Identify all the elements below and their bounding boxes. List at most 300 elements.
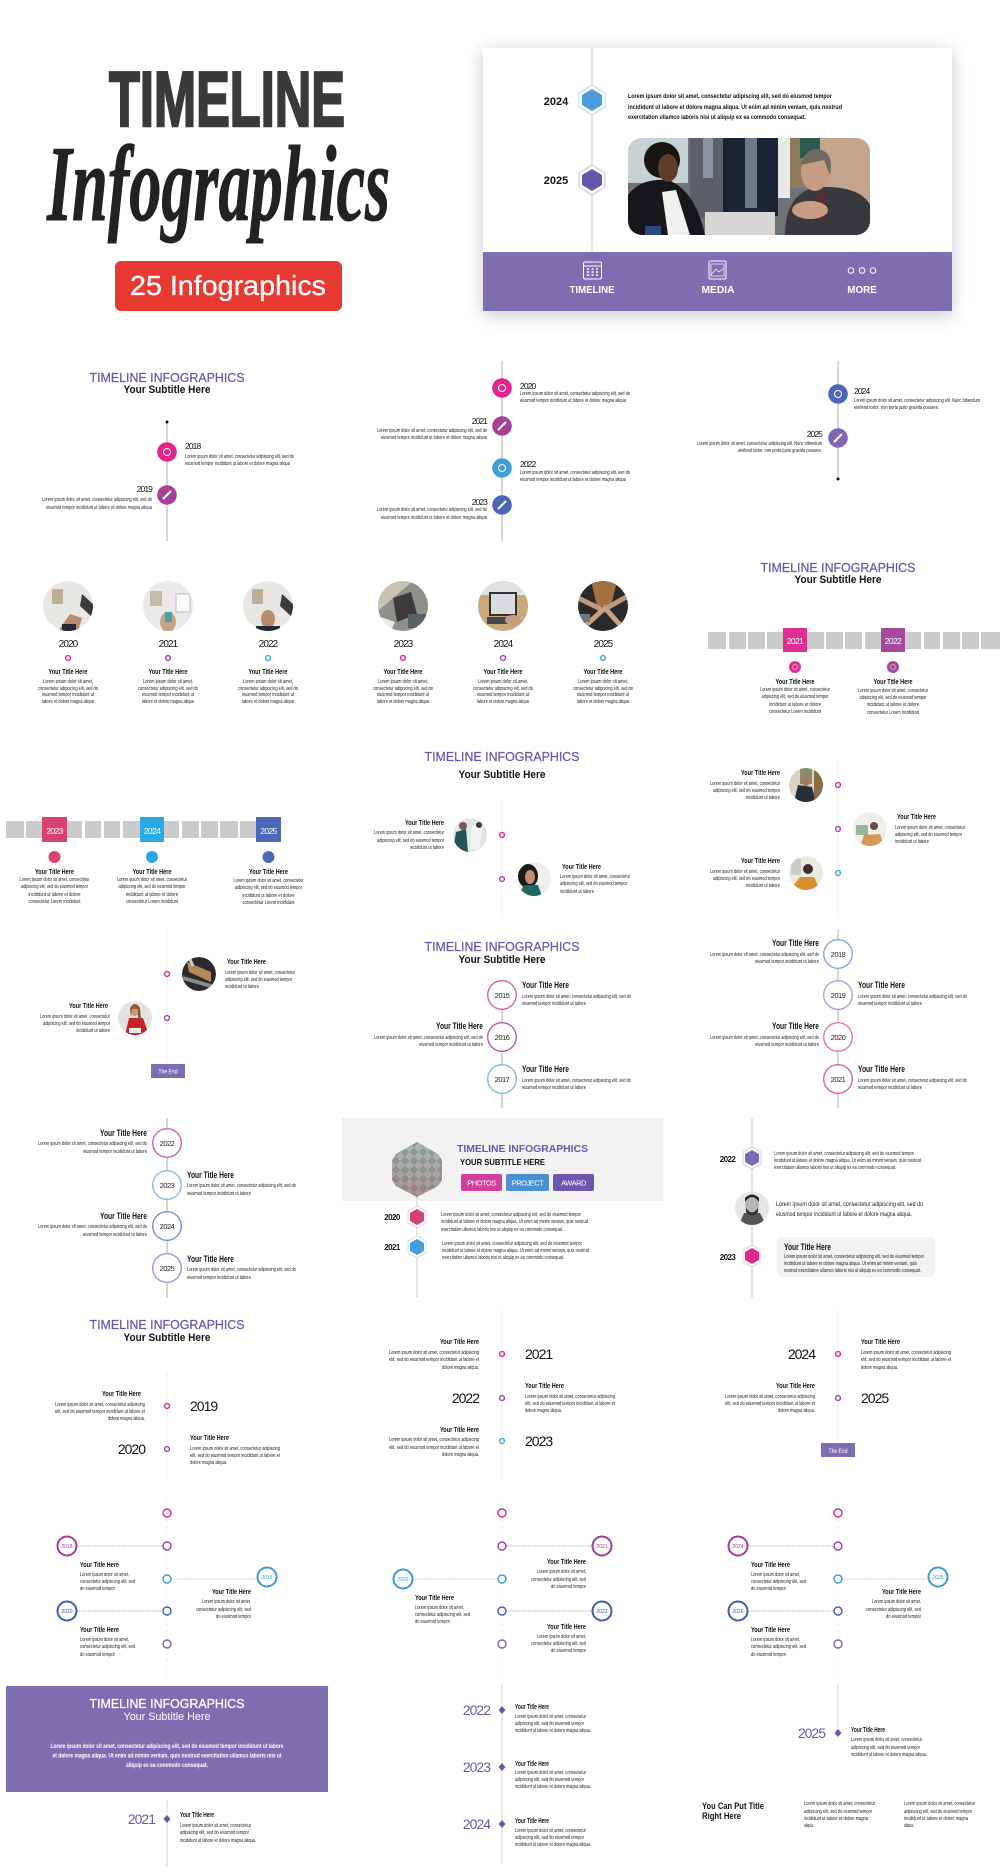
panel: big year timeline 2024-2025: dolore magna aliqua. (778, 1408, 815, 1414)
panel: big year timeline 2019-2020: dolore magna aliqua. (190, 1460, 227, 1466)
panel: hex timeline with portrait: 2022 (720, 1155, 736, 1164)
panel: photo columns 2020-2022: consectetur adipiscing elit, sed do (238, 686, 298, 692)
hexagon 2024: 2024 (544, 96, 569, 108)
panel: block timeline 2021-2022: 2021 (787, 636, 804, 646)
panel: diamond timeline 2025 with closing text (702, 1684, 975, 1829)
panel: timeline 2020-2023: 2021 (472, 416, 488, 426)
hexagon 2025 (544, 165, 605, 195)
panel: photo columns 2020-2022: Your Title Here (248, 669, 288, 676)
panel: big year timeline 2021-2023: dolore magna aliqua. (442, 1365, 479, 1371)
panel: ring timeline 2022-2025: 2022 (160, 1139, 175, 1148)
panel: ring timeline 2015-2017: Your Title Here (436, 1021, 483, 1031)
panel: dotted timeline left: consectetur adipiscing elit, sed (196, 1607, 251, 1613)
panel: timeline 2018-2019: Lorem ipsum dolor sit amet, consectetur adipiscing elit, sed do (42, 497, 152, 503)
photo 2020 (43, 581, 93, 632)
panel: purple header with 2021 (6, 1686, 328, 1867)
panel: photo columns 2020-2022: eiusmod tempor incididunt ut (42, 692, 94, 698)
panel: dotted timeline left: Lorem ipsum dolor sit amet, (80, 1637, 129, 1643)
panel: photo columns 2020-2022: labore et dolore magna aliqua (242, 699, 294, 705)
panel: hex timeline with portrait: Lorem ipsum dolor sit amet, consectetur adipiscing elit, sed do eiusmod tempor (774, 1151, 914, 1157)
panel: dotted timeline center: Your Title Here (547, 1559, 586, 1566)
panel: dotted timeline right: consectetur adipiscing elit, sed (751, 1579, 806, 1585)
nav: timeline (570, 262, 614, 296)
panel: photo timeline two items: Your Title Here (405, 820, 444, 827)
panel: timeline 2020-2023 (377, 361, 630, 541)
panel: diamond timeline 2025 with closing text: Lorem ipsum dolor sit amet, consectetur (904, 1801, 975, 1807)
panel: big year timeline 2024-2025: Lorem ipsum dolor sit amet, consectetur adipiscing (725, 1394, 815, 1400)
panel: dotted timeline left: do eiusmod tempor (80, 1586, 115, 1592)
panel: photo columns 2023-2025: 2025 (594, 639, 614, 650)
panel: photo columns 2023-2025 (373, 581, 633, 705)
panel: photo timeline three items: Your Title Here (741, 770, 780, 777)
panel: big year timeline 2021-2023: elit, sed do eiusmod tempor incididunt ut labore et (525, 1401, 615, 1407)
panel: photo timeline with The End: incididunt ut labore (76, 1028, 110, 1034)
panel: photo columns 2023-2025: labore et dolore magna aliqua (577, 699, 629, 705)
title: Infographics script: Infographics (46, 125, 390, 244)
panel: big year timeline 2024-2025: 2025 (861, 1390, 889, 1406)
panel: timeline 2020-2023: Lorem ipsum dolor sit amet, consectetur adipiscing elit, sed do (520, 470, 630, 476)
panel: photo timeline two items: Your Title Here (562, 864, 601, 871)
panel: ring timeline 2018-2021: Lorem ipsum dolor sit amet, consectetur adipiscing elit, sed do (858, 1078, 967, 1084)
panel: photo timeline with The End (40, 928, 295, 1078)
panel: block timeline 2023-2025: adipiscing elit, sed do eiusmod tempor (21, 884, 88, 890)
photo 2021 (143, 581, 193, 632)
panel: photo timeline three items: Lorem ipsum dolor sit amet, consectetur (710, 869, 780, 875)
title: TIMELINE: TIMELINE (109, 55, 345, 143)
panel: grey header with buttons and hex timeline: exercitation ullamco laboris nisi ut aliquip ex ea commodo consequat. (441, 1227, 563, 1233)
panel: ring timeline 2018-2021: Your Title Here (858, 980, 905, 990)
panel: ring timeline 2018-2021: eiusmod tempor incididunt ut labore (755, 959, 819, 965)
panel: block timeline 2021-2022: Lorem ipsum dolor sit amet, consectetur (858, 688, 928, 694)
panel: photo columns 2020-2022: 2021 (159, 639, 179, 650)
panel: dotted timeline left: do eiusmod tempor (216, 1614, 251, 1620)
panel: photo timeline three items: Your Title Here (897, 814, 936, 821)
panel: ring timeline 2018-2021: Your Title Here (772, 1021, 819, 1031)
panel: timeline 2018-2019: eiusmod tempor incididunt ut labore et dolore magna aliqua (46, 505, 152, 511)
panel: big year timeline 2024-2025: 2024 (788, 1346, 816, 1362)
panel: ring timeline 2022-2025 (38, 1118, 296, 1298)
panel: block timeline 2023-2025 (6, 817, 304, 906)
nav: media (702, 261, 735, 296)
panel: dotted timeline right: consectetur adipiscing elit, sed (866, 1607, 921, 1613)
panel: diamond timeline 2022-2024 (463, 1684, 591, 1864)
panel: ring timeline 2022-2025: Lorem ipsum dolor sit amet, consectetur adipiscing elit, sed do (38, 1224, 147, 1230)
panel: big year timeline 2019-2020: 2019 (190, 1398, 218, 1414)
panel: block timeline 2023-2025: 2025 (260, 826, 278, 836)
panel: diamond timeline 2022-2024: Your Title Here (515, 1818, 549, 1825)
photo: portrait (735, 1191, 769, 1225)
panel: block timeline 2021-2022: Your Subtitle Here (794, 574, 882, 586)
panel: block timeline 2023-2025: incididunt ut labore et dolore (126, 892, 178, 898)
panel: photo timeline with The End: adipiscing elit, sed do eiusmod tempor (225, 977, 292, 983)
panel: ring timeline 2018-2021: Your Title Here (772, 938, 819, 948)
panel: big year timeline 2021-2023: 2021 (525, 1346, 553, 1362)
panel: big year timeline 2021-2023: Your Title Here (525, 1383, 564, 1390)
text block: Lorem ipsum dolor sit amet, consectetur adipiscing elit, sed do eiusmod tempor (628, 93, 832, 100)
panel: big year timeline 2021-2023: dolore magna aliqua. (525, 1408, 562, 1414)
panel: ring timeline 2015-2017: Lorem ipsum dolor sit amet, consectetur adipiscing elit, sed do (522, 1078, 631, 1084)
panel: ring timeline 2015-2017: eiusmod tempor incididunt ut labore (522, 1085, 586, 1091)
badge: 25 Infographics: 25 Infographics (130, 270, 326, 301)
panel: timeline 2018-2019 (42, 371, 294, 541)
button: project (506, 1174, 549, 1191)
panel: diamond timeline 2025 with closing text: adipiscing elit, sed do eiusmod tempor (804, 1809, 872, 1815)
panel: big year timeline 2019-2020: Your Title Here (190, 1435, 229, 1442)
panel: dotted timeline left: Your Title Here (212, 1589, 251, 1596)
button: award (553, 1174, 594, 1191)
panel: timeline 2020-2023: eiusmod tempor incididunt ut labore et dolore magna aliqua (381, 515, 487, 521)
panel: ring timeline 2022-2025: eiusmod tempor incididunt ut labore (187, 1275, 251, 1281)
panel: big year timeline 2019-2020: Lorem ipsum dolor sit amet, consectetur adipiscing (55, 1402, 145, 1408)
panel: big year timeline 2021-2023: Lorem ipsum dolor sit amet, consectetur adipiscing (389, 1437, 479, 1443)
panel: ring timeline 2022-2025: eiusmod tempor incididunt ut labore (83, 1232, 147, 1238)
panel: dotted timeline left: Lorem ipsum dolor sit amet, (80, 1572, 129, 1578)
panel: ring timeline 2015-2017 (374, 940, 631, 1108)
panel: diamond timeline 2022-2024: adipiscing elit, sed do eiusmod tempor (515, 1721, 584, 1727)
panel: timeline 2018-2019: Lorem ipsum dolor sit amet, consectetur adipiscing elit, sed do (185, 454, 294, 460)
panel: block timeline 2023-2025: Lorem ipsum dolor sit amet, consectetur (117, 877, 187, 883)
panel: grey header with buttons and hex timeline: 2020 (384, 1213, 401, 1222)
panel: photo columns 2023-2025: 2023 (394, 639, 414, 650)
panel: hex timeline with portrait: Lorem ipsum dolor sit amet, consectetur adipiscing elit, sed do (776, 1201, 923, 1208)
panel: big year timeline 2021-2023 (389, 1310, 615, 1480)
panel: photo columns 2023-2025: labore et dolore magna aliqua (377, 699, 429, 705)
panel: ring timeline 2018-2021: Your Title Here (858, 1064, 905, 1074)
panel: photo columns 2020-2022 (38, 581, 298, 705)
panel: ring timeline 2022-2025: Your Title Here (100, 1128, 147, 1138)
panel: block timeline 2023-2025: Lorem ipsum dolor sit amet, consectetur (20, 877, 90, 883)
panel: block timeline 2021-2022: consectetur Lorem incididunt (769, 709, 821, 715)
panel: dotted timeline center: Your Title Here (547, 1624, 586, 1631)
panel: purple header with 2021: incididunt ut labore et dolore magna aliqua. (180, 1838, 256, 1844)
panel: dotted timeline center: Lorem ipsum dolor sit amet, (537, 1569, 586, 1575)
panel: photo columns 2023-2025: consectetur adipiscing elit, sed do (373, 686, 433, 692)
panel: dotted timeline center: Your Title Here (415, 1595, 454, 1602)
panel: diamond timeline 2025 with closing text: Lorem ipsum dolor sit amet, consectetur (804, 1801, 875, 1807)
panel: photo columns 2023-2025: eiusmod tempor incididunt ut (477, 692, 529, 698)
nav: more: MORE (847, 284, 877, 296)
panel: dotted timeline right: 2026 (732, 1609, 744, 1615)
panel: timeline 2024-2025: eleifend tortor, non porta justo gravida posuere. (854, 405, 939, 411)
panel: purple header with 2021: aliquip ex ea commodo consequat. (126, 1762, 208, 1769)
panel: purple header with 2021: Lorem ipsum dolor sit amet, consectetur adipiscing elit, sed do eiusmod tempor incididunt ut labore (50, 1743, 284, 1750)
panel: block timeline 2023-2025: adipiscing elit, sed do eiusmod tempor (118, 884, 186, 890)
photo 2024 (478, 581, 528, 631)
panel: timeline 2018-2019: TIMELINE INFOGRAPHICS (90, 371, 244, 385)
panel: purple header with 2021: adipiscing elit, sed do eiusmod tempor (180, 1830, 249, 1836)
panel: grey header with buttons and hex timeline: incididunt ut labore et dolore magna aliqua. Ut enim ad minim veniam, quis nostrud (442, 1248, 589, 1254)
panel: photo columns 2023-2025: consectetur adipiscing elit, sed do (573, 686, 633, 692)
panel: ring timeline 2018-2021: eiusmod tempor incididunt ut labore (858, 1085, 922, 1091)
panel: dotted timeline center: 2022 (397, 1577, 409, 1583)
panel: block timeline 2023-2025: Your Title Here (249, 869, 288, 876)
panel: dotted timeline right: Lorem ipsum dolor sit amet, (751, 1637, 800, 1643)
panel: diamond timeline 2025 with closing text: incididunt ut labore et dolore magna (904, 1816, 968, 1822)
photo 2023 (378, 581, 428, 631)
panel: big year timeline 2024-2025: The End (828, 1448, 848, 1455)
panel: dotted timeline right: Your Title Here (751, 1562, 790, 1569)
panel: grey header with buttons and hex timeline: 2021 (384, 1243, 401, 1252)
panel: timeline 2024-2025: eleifend tortor, non porta justo gravida posuere. (738, 448, 822, 454)
panel: timeline 2020-2023: Lorem ipsum dolor sit amet, consectetur adipiscing elit, sed do (377, 428, 487, 434)
panel: dotted timeline center: do eiusmod tempor (551, 1648, 586, 1654)
panel: block timeline 2023-2025: incididunt ut labore et dolore (242, 893, 295, 899)
panel: block timeline 2023-2025: Lorem ipsum dolor sit amet, consectetur (234, 878, 304, 884)
photo 2025 (578, 581, 628, 631)
panel: dotted timeline right: consectetur adipiscing elit, sed (751, 1644, 806, 1650)
panel: big year timeline 2019-2020: Lorem ipsum dolor sit amet, consectetur adipiscing (190, 1446, 280, 1452)
panel: big year timeline 2019-2020: elit, sed do eiusmod tempor incididunt ut labore et (55, 1409, 145, 1415)
panel: dotted timeline right: Your Title Here (751, 1627, 790, 1634)
panel: timeline 2020-2023: 2022 (520, 459, 536, 469)
panel: hero slide preview (483, 48, 952, 315)
panel: diamond timeline 2022-2024: incididunt ut labore et dolore magna aliqua. (515, 1842, 591, 1848)
panel: timeline 2020-2023: eiusmod tempor incididunt ut labore et dolore magna aliqua (381, 435, 487, 441)
panel: photo columns 2020-2022: eiusmod tempor incididunt ut (242, 692, 294, 698)
panel: photo timeline two items (374, 750, 630, 917)
panel: photo timeline three items: Lorem ipsum dolor sit amet, consectetur (895, 825, 965, 831)
panel: timeline 2020-2023: 2020 (520, 381, 536, 391)
panel: big year timeline 2021-2023: Lorem ipsum dolor sit amet, consectetur adipiscing (525, 1394, 615, 1400)
panel: grey header with buttons and hex timeline: Lorem ipsum dolor sit amet, consectetur adipiscing elit, sed do eiusmod tempor (442, 1241, 582, 1247)
panel: photo columns 2023-2025: 2024 (494, 639, 514, 650)
hexagon 2024 (544, 85, 605, 115)
panel: ring timeline 2022-2025: eiusmod tempor incididunt ut labore (187, 1191, 251, 1197)
button: photos: PHOTOS (467, 1178, 496, 1188)
panel: ring timeline 2022-2025: 2023 (160, 1181, 175, 1190)
panel: block timeline 2021-2022: consectetur Lorem incididunt (867, 710, 919, 716)
panel: purple header with 2021: et dolore magna aliqua. Ut enim ad minim veniam, quis nostrud exercitation ullamco laboris nisi ut (52, 1752, 282, 1760)
panel: big year timeline 2019-2020: elit, sed do eiusmod tempor incididunt ut labore et (190, 1453, 280, 1459)
panel: timeline 2018-2019: 2019 (137, 484, 153, 494)
panel: purple header with 2021: Lorem ipsum dolor sit amet, consectetur (180, 1823, 251, 1829)
panel: grey header with buttons and hex timeline: YOUR SUBTITLE HERE (460, 1157, 545, 1167)
button: award: AWARD (561, 1178, 587, 1188)
panel: diamond timeline 2022-2024: Your Title Here (515, 1761, 549, 1768)
panel: photo timeline two items: incididunt ut labore (560, 889, 594, 895)
panel: photo timeline three items: incididunt ut labore (746, 795, 780, 801)
panel: dotted timeline left: Your Title Here (80, 1562, 119, 1569)
panel: purple header with 2021: 2021 (128, 1811, 156, 1827)
panel: diamond timeline 2022-2024: Lorem ipsum dolor sit amet, consectetur (515, 1770, 586, 1776)
panel: photo timeline three items: adipiscing elit, sed do eiusmod tempor (895, 832, 962, 838)
panel: ring timeline 2015-2017: TIMELINE INFOGRAPHICS (424, 940, 580, 954)
panel: ring timeline 2018-2021: eiusmod tempor incididunt ut labore (755, 1042, 819, 1048)
panel: block timeline 2021-2022: incididunt ut labore et dolore (867, 702, 919, 708)
panel: photo columns 2023-2025: Lorem ipsum dolor sit amet, (478, 679, 528, 685)
panel: hex timeline with portrait (720, 1118, 935, 1298)
panel: block timeline 2023-2025: consectetur Lorem incididunt (242, 900, 295, 906)
panel: diamond timeline 2025 with closing text: aliqua. (904, 1823, 914, 1829)
panel: photo columns 2020-2022: Your Title Here (48, 669, 88, 676)
panel: ring timeline 2015-2017: Lorem ipsum dolor sit amet, consectetur adipiscing elit, sed do (374, 1035, 483, 1041)
panel: hex timeline with portrait: incididunt ut labore et dolore magna aliqua. Ut enim ad minim veniam, quis nostrud (774, 1158, 921, 1164)
panel: dotted timeline left: 2020 (61, 1609, 73, 1615)
panel: big year timeline 2024-2025: Lorem ipsum dolor sit amet, consectetur adipiscing (861, 1350, 951, 1356)
panel: photo columns 2023-2025: labore et dolore magna aliqua (477, 699, 529, 705)
text block (628, 93, 842, 121)
panel: ring timeline 2018-2021: 2018 (831, 950, 846, 959)
panel: hex timeline with portrait: nostrud exercitation ullamco laboris nisi ut aliquip ex ea commodo consequat. (784, 1268, 921, 1274)
panel: diamond timeline 2025 with closing text: Your Title Here (851, 1727, 885, 1734)
panel: dotted timeline center: 2021 (596, 1544, 608, 1550)
panel: dotted timeline left: consectetur adipiscing elit, sed (80, 1579, 135, 1585)
panel: big year timeline 2021-2023: Your Title Here (440, 1339, 479, 1346)
panel: photo timeline two items: adipiscing elit, sed do eiusmod tempor (377, 838, 444, 844)
panel: dotted timeline left: do eiusmod tempor (80, 1652, 115, 1658)
panel: diamond timeline 2025 with closing text: aliqua. (804, 1823, 814, 1829)
panel: diamond timeline 2025 with closing text: incididunt ut labore et dolore magna (804, 1816, 868, 1822)
panel: block timeline 2023-2025: 2024 (144, 826, 161, 836)
panel: ring timeline 2022-2025: Your Title Here (100, 1211, 147, 1221)
panel: big year timeline 2021-2023: Lorem ipsum dolor sit amet, consectetur adipiscing (389, 1350, 479, 1356)
panel: dotted timeline center: consectetur adipiscing elit, sed (415, 1612, 470, 1618)
panel: photo timeline three items: Your Title Here (741, 858, 780, 865)
panel: purple header with 2021: Your Subtitle Here (124, 1711, 210, 1723)
panel: ring timeline 2015-2017: 2015 (495, 991, 510, 1000)
panel: big year timeline 2021-2023: Your Title Here (440, 1427, 479, 1434)
panel: big year timeline 2021-2023: dolore magna aliqua. (442, 1452, 479, 1458)
panel: big year timeline 2024-2025: Your Title Here (861, 1339, 900, 1346)
panel: big year timeline 2024-2025: elit, sed do eiusmod tempor incididunt ut labore et (861, 1357, 951, 1363)
panel: block timeline 2023-2025: adipiscing elit, sed do eiusmod tempor (235, 885, 302, 891)
panel: dotted timeline center: 2023 (596, 1609, 608, 1615)
panel: diamond timeline 2025 with closing text: You Can Put Title (702, 1801, 764, 1812)
panel: dotted timeline center: Lorem ipsum dolor sit amet, (415, 1605, 464, 1611)
panel: dotted timeline right: 2024 (732, 1544, 744, 1550)
panel: big year timeline 2024-2025: Your Title Here (776, 1383, 815, 1390)
panel: timeline 2020-2023: eiusmod tempor incididunt ut labore et dolore magna aliqua (520, 398, 626, 404)
text block: exercitation ullamco laboris nisi ut aliquip ex ea commodo consequat. (628, 114, 806, 121)
panel: dotted timeline center: consectetur adipiscing elit, sed (531, 1577, 586, 1583)
panel: photo timeline two items: adipiscing elit, sed do eiusmod tempor (560, 881, 627, 887)
panel: photo columns 2020-2022: Lorem ipsum dolor sit amet, (143, 679, 193, 685)
panel: dotted timeline left: Lorem ipsum dolor sit amet, (202, 1599, 251, 1605)
panel: big year timeline 2021-2023: elit, sed do eiusmod tempor incididunt ut labore et (389, 1357, 479, 1363)
panel: big year timeline 2021-2023: 2022 (452, 1390, 480, 1406)
panel: diamond timeline 2022-2024: adipiscing elit, sed do eiusmod tempor (515, 1777, 584, 1783)
panel: block timeline 2021-2022: adipiscing elit, sed do eiusmod tempor (762, 694, 829, 700)
panel: diamond timeline 2025 with closing text: adipiscing elit, sed do eiusmod tempor (904, 1809, 972, 1815)
panel: ring timeline 2015-2017: Lorem ipsum dolor sit amet, consectetur adipiscing elit, sed do (522, 994, 631, 1000)
panel: photo columns 2020-2022: labore et dolore magna aliqua (42, 699, 94, 705)
panel: ring timeline 2018-2021: eiusmod tempor incididunt ut labore (858, 1001, 922, 1007)
panel: block timeline 2021-2022: TIMELINE INFOGRAPHICS (760, 561, 916, 575)
panel: block timeline 2023-2025: Your Title Here (35, 869, 74, 876)
panel: grey header with buttons and hex timeline: TIMELINE INFOGRAPHICS (457, 1143, 588, 1155)
panel: big year timeline 2024-2025: elit, sed do eiusmod tempor incididunt ut labore et (725, 1401, 815, 1407)
panel: dotted timeline center: do eiusmod tempor (551, 1584, 586, 1590)
panel: ring timeline 2018-2021: Lorem ipsum dolor sit amet, consectetur adipiscing elit, sed do (858, 994, 967, 1000)
nav: more (847, 268, 877, 296)
panel: photo columns 2020-2022: Lorem ipsum dolor sit amet, (43, 679, 93, 685)
panel: ring timeline 2018-2021: 2020 (831, 1033, 846, 1042)
panel: hex timeline with portrait: exercitation ullamco laboris nisi ut aliquip ex ea commodo consequat. (774, 1165, 896, 1171)
panel: block timeline 2021-2022: Lorem ipsum dolor sit amet, consectetur (760, 687, 830, 693)
text block: incididunt ut labore et dolore magna aliqua. Ut enim ad minim veniam, quis nostrud (628, 104, 842, 111)
panel: block timeline 2023-2025: consectetur Lorem incididunt (28, 899, 81, 905)
panel: diamond timeline 2022-2024: Lorem ipsum dolor sit amet, consectetur (515, 1828, 586, 1834)
panel: ring timeline 2022-2025: 2025 (160, 1264, 175, 1273)
panel: ring timeline 2015-2017: 2017 (495, 1075, 510, 1084)
panel: photo timeline three items: Lorem ipsum dolor sit amet, consectetur (710, 781, 780, 787)
panel: ring timeline 2018-2021: Lorem ipsum dolor sit amet, consectetur adipiscing elit, sed do (710, 952, 819, 958)
panel: dotted timeline right: 2025 (932, 1575, 944, 1581)
panel: ring timeline 2018-2021 (710, 929, 967, 1108)
panel: timeline 2024-2025: 2025 (807, 429, 823, 439)
panel: block timeline 2021-2022: incididunt ut labore et dolore (769, 702, 821, 708)
panel: diamond timeline 2022-2024: Your Title Here (515, 1704, 549, 1711)
panel: photo timeline three items: incididunt ut labore (895, 839, 929, 845)
panel: timeline 2020-2023: 2023 (472, 497, 488, 507)
panel: hex timeline with portrait: 2023 (720, 1253, 736, 1262)
panel: grey header with buttons and hex timeline: Lorem ipsum dolor sit amet, consectetur adipiscing elit, sed do eiusmod tempor (441, 1212, 581, 1218)
panel: dotted timeline left (58, 1498, 276, 1677)
panel: dotted timeline center: Lorem ipsum dolor sit amet, (537, 1634, 586, 1640)
panel: dotted timeline right: Your Title Here (882, 1589, 921, 1596)
panel: grey header with buttons and hex timeline (342, 1118, 663, 1298)
panel: block timeline 2023-2025: consectetur Lorem incididunt (126, 899, 178, 905)
panel: dotted timeline right: do eiusmod tempor (751, 1586, 786, 1592)
panel: hex timeline with portrait: eiusmod tempor incididunt ut labore et dolore magna aliqua. (776, 1211, 912, 1218)
panel: photo columns 2023-2025: eiusmod tempor incididunt ut (377, 692, 429, 698)
badge: 25 Infographics (115, 261, 342, 311)
panel: photo columns 2020-2022: eiusmod tempor incididunt ut (142, 692, 194, 698)
panel: photo columns 2023-2025: consectetur adipiscing elit, sed do (473, 686, 533, 692)
panel: photo timeline three items (710, 761, 965, 917)
panel: ring timeline 2015-2017: eiusmod tempor incididunt ut labore (419, 1042, 483, 1048)
panel: timeline 2024-2025: Lorem ipsum dolor sit amet, consectetur adipiscing elit. Nunc bibendum (697, 441, 822, 447)
panel: diamond timeline 2025 with closing text: adipiscing elit, sed do eiusmod tempor (851, 1745, 920, 1751)
panel: ring timeline 2022-2025: 2024 (160, 1222, 175, 1231)
panel: photo timeline two items: TIMELINE INFOGRAPHICS (424, 750, 580, 764)
button: photos (461, 1174, 502, 1191)
panel: photo columns 2023-2025: Your Title Here (584, 669, 623, 676)
panel: ring timeline 2015-2017: eiusmod tempor incididunt ut labore (522, 1001, 586, 1007)
panel: ring timeline 2022-2025: Lorem ipsum dolor sit amet, consectetur adipiscing elit, sed do (38, 1141, 147, 1147)
panel: big year timeline 2019-2020: 2020 (118, 1441, 146, 1457)
panel: ring timeline 2018-2021: 2021 (831, 1075, 846, 1084)
panel: timeline 2020-2023: eiusmod tempor incididunt ut labore et dolore magna aliqua (520, 477, 626, 483)
panel: timeline 2020-2023: Lorem ipsum dolor sit amet, consectetur adipiscing elit, sed do (520, 391, 630, 397)
panel: diamond timeline 2022-2024: 2023 (463, 1759, 491, 1775)
panel: hex timeline with portrait: incididunt ut labore et dolore magna aliqua. Ut enim ad minim veniam, quis (784, 1261, 917, 1267)
nav: media: MEDIA (702, 284, 735, 296)
panel: diamond timeline 2025 with closing text: incididunt ut labore et dolore magna aliqua. (851, 1752, 927, 1758)
panel: ring timeline 2022-2025: Your Title Here (187, 1254, 234, 1264)
panel: dotted timeline left: Your Title Here (80, 1627, 119, 1634)
panel: big year timeline 2019-2020: Your Title Here (102, 1391, 141, 1398)
panel: ring timeline 2018-2021: Lorem ipsum dolor sit amet, consectetur adipiscing elit, sed do (710, 1035, 819, 1041)
panel: block timeline 2023-2025: 2023 (46, 826, 64, 836)
panel: purple header with 2021: TIMELINE INFOGRAPHICS (90, 1697, 244, 1711)
panel: photo columns 2020-2022: Your Title Here (148, 669, 188, 676)
panel: big year timeline 2024-2025: dolore magna aliqua. (861, 1365, 898, 1371)
panel: dotted timeline left: consectetur adipiscing elit, sed (80, 1644, 135, 1650)
panel: photo columns 2020-2022: consectetur adipiscing elit, sed do (138, 686, 198, 692)
panel: photo columns 2020-2022: Lorem ipsum dolor sit amet, (243, 679, 293, 685)
panel: ring timeline 2018-2021: 2019 (831, 991, 846, 1000)
panel: photo columns 2020-2022: 2022 (259, 639, 279, 650)
panel: photo columns 2023-2025: Lorem ipsum dolor sit amet, (378, 679, 428, 685)
panel: block timeline 2021-2022: adipiscing elit, sed do eiusmod tempor (860, 695, 927, 701)
panel: timeline 2018-2019: Your Subtitle Here (124, 384, 210, 396)
panel: timeline 2020-2023: Lorem ipsum dolor sit amet, consectetur adipiscing elit, sed do (377, 507, 487, 513)
hexagon 2025: 2025 (544, 175, 568, 187)
panel: timeline 2018-2019: eiusmod tempor incididunt ut labore et dolore magna aliqua (185, 461, 290, 467)
panel: photo columns 2023-2025: Lorem ipsum dolor sit amet, (578, 679, 628, 685)
panel: photo timeline three items: adipiscing elit, sed do eiusmod tempor (713, 788, 780, 794)
